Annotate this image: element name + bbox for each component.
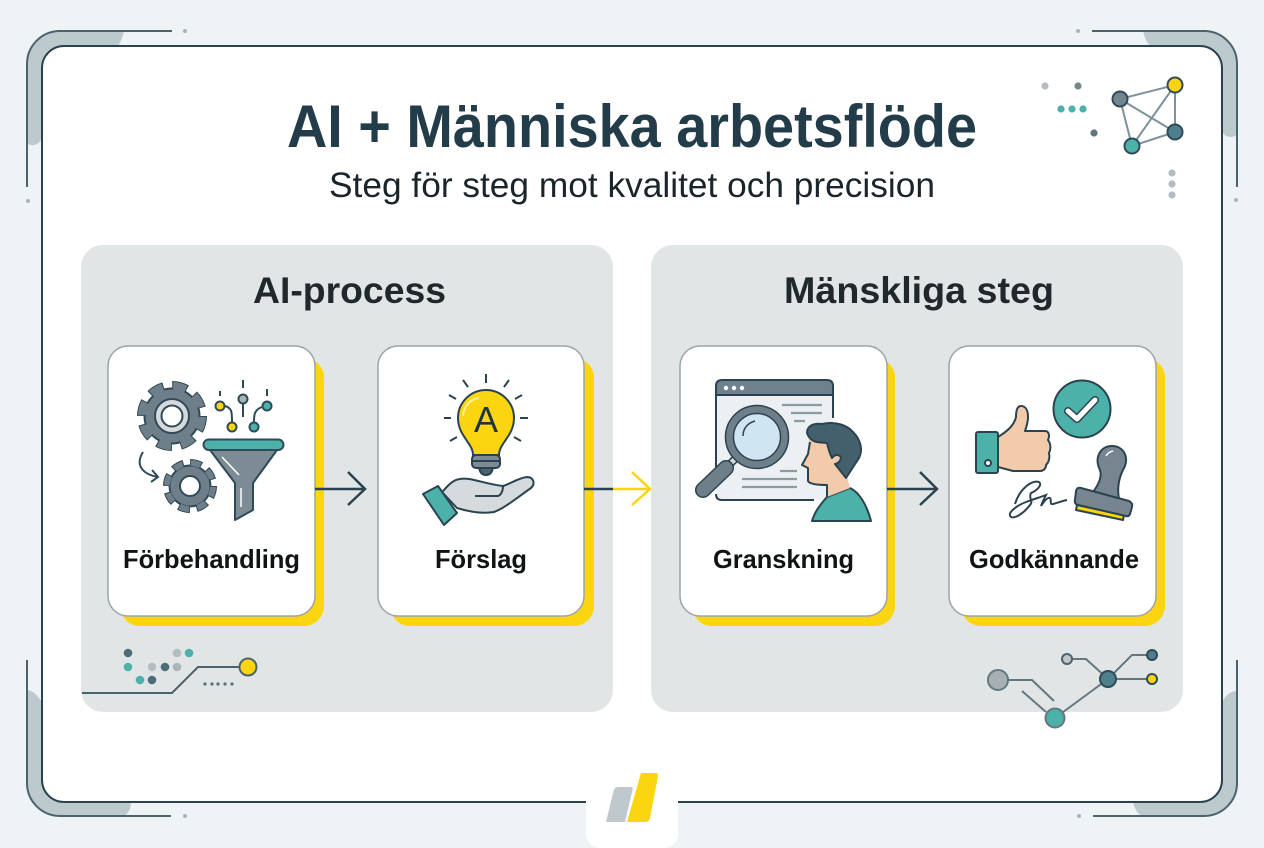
- label: Godkännande: Godkännande: [969, 544, 1139, 574]
- icon: light bulb and hand: [423, 374, 534, 525]
- title: AI + Människa arbetsflöde: [287, 93, 977, 160]
- icon: person: [802, 423, 871, 521]
- icon: bulb highlight: [463, 398, 479, 416]
- card: Godkännande: [949, 346, 1165, 626]
- icon: bulb: [458, 390, 514, 455]
- decoration: network bottom right: [988, 650, 1157, 728]
- icon: gears and funnel: [140, 380, 284, 520]
- icon: large gear: [142, 386, 202, 446]
- icon: reviewer with magnifier: [703, 380, 871, 521]
- heading: AI-process: AI-process: [253, 270, 446, 311]
- card: Granskning: [680, 346, 895, 626]
- arrow: Granskning to Godkännande: [887, 472, 937, 505]
- icon: browser window: [716, 380, 833, 500]
- panel: Mänskliga steg: [651, 245, 1183, 712]
- icon: network top right: [1041, 78, 1182, 199]
- icon: signature: [1010, 482, 1067, 517]
- panel: AI-process: [81, 245, 613, 712]
- icon: check badge: [1054, 380, 1110, 438]
- subtitle: Steg för steg mot kvalitet och precision: [329, 166, 935, 205]
- logo tab: [586, 773, 678, 848]
- icon: magnifier: [703, 406, 788, 490]
- icon: stamp: [1075, 446, 1132, 520]
- icon: hand: [423, 477, 534, 525]
- icon: small gear: [167, 463, 213, 509]
- arrow: Förbehandling to Förslag: [315, 472, 365, 505]
- card: Förbehandling: [108, 346, 324, 626]
- heading: Mänskliga steg: Mänskliga steg: [784, 270, 1054, 311]
- label: Förbehandling: Förbehandling: [123, 544, 300, 574]
- icon: curved arrow: [140, 452, 158, 482]
- label: Förslag: Förslag: [435, 544, 527, 574]
- icon: funnel: [204, 440, 284, 520]
- arrow: Förslag to Granskning: [584, 472, 650, 505]
- icon: approval symbols: [976, 380, 1132, 520]
- icon: bulb base: [472, 455, 500, 475]
- icon: rays: [444, 374, 528, 441]
- label: Granskning: Granskning: [713, 544, 854, 574]
- icon: thumbs up: [976, 406, 1050, 473]
- card: Förslag: [378, 346, 594, 626]
- decoration: circuit bottom left: [82, 649, 256, 693]
- icon: data nodes: [216, 380, 272, 432]
- letter A in bulb: A: [474, 399, 498, 440]
